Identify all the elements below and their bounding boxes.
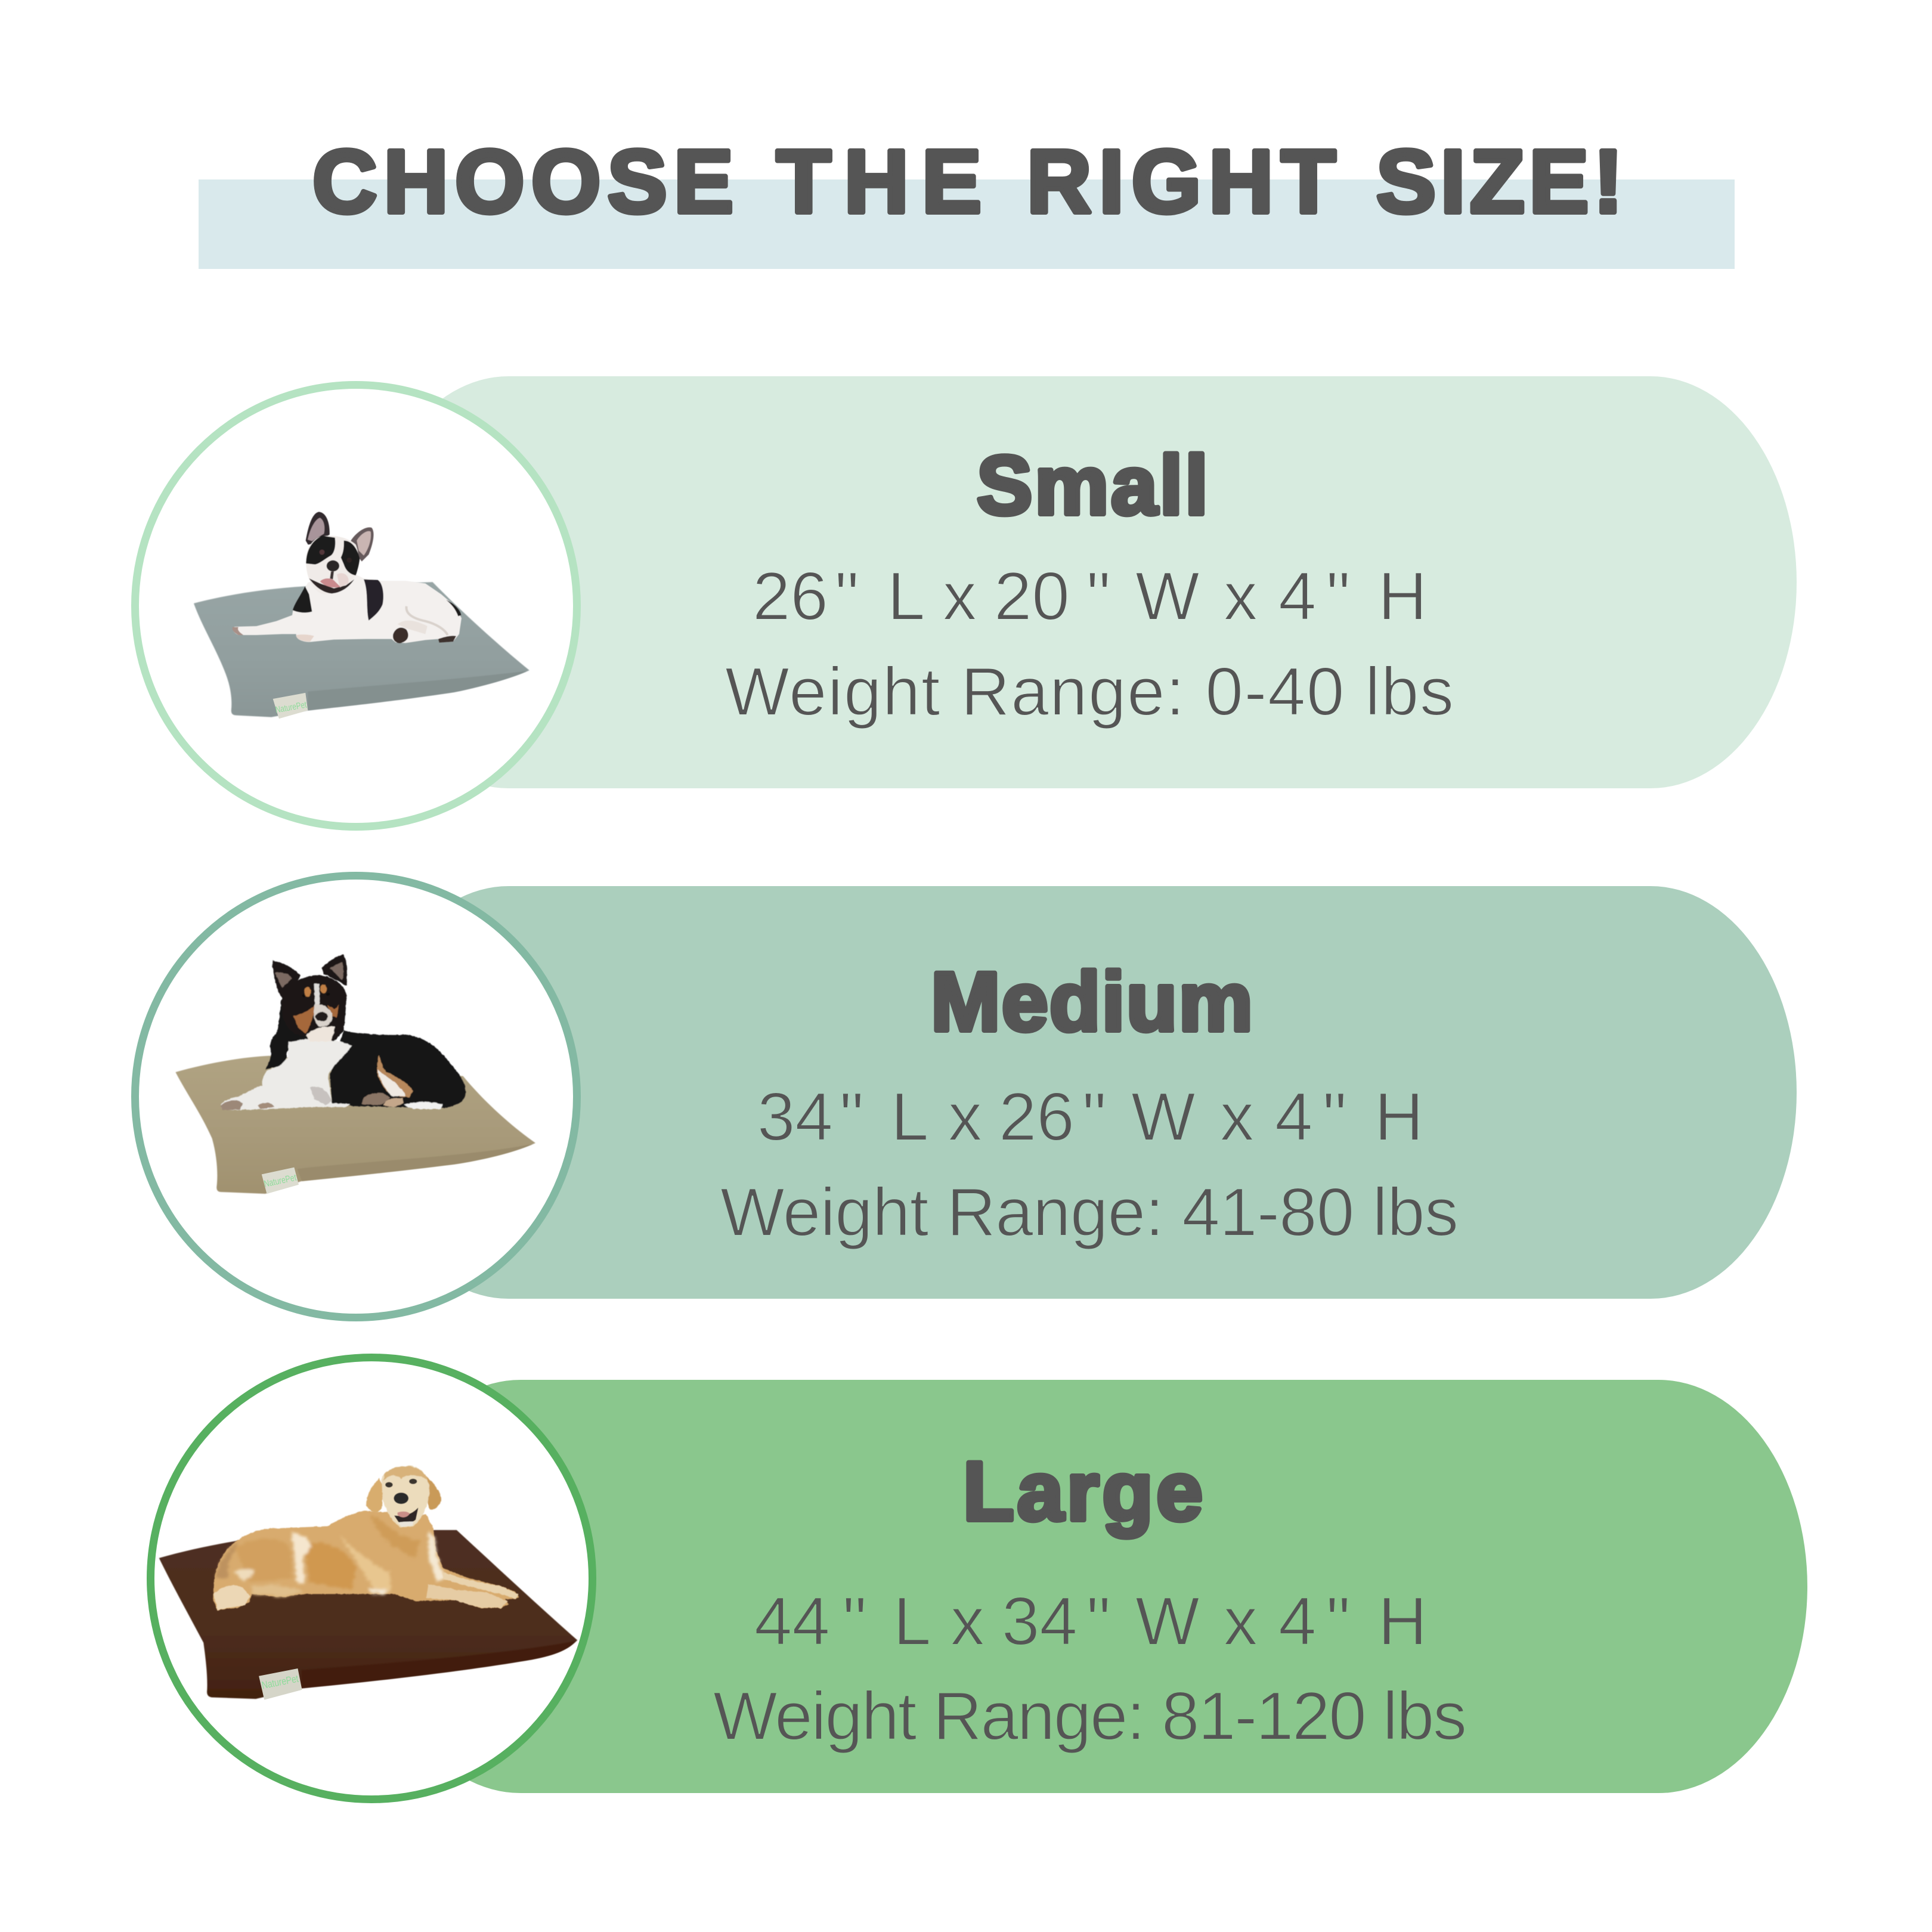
medium heading: Medium (931, 955, 1253, 1048)
medium dimensions: L (891, 1079, 928, 1155)
medium dimensions: W (1131, 1079, 1196, 1155)
title (312, 131, 1623, 231)
small dimensions: 26 (753, 559, 828, 634)
icon: border collie on tan pillow (175, 955, 535, 1194)
panel: small size (363, 376, 1797, 788)
medium dimensions: 26 (999, 1079, 1075, 1155)
large dimensions: 44 (754, 1584, 830, 1659)
brown pillow: NaturePet (261, 1673, 299, 1691)
tan pillow: NaturePet (263, 1173, 298, 1190)
medium dimensions: 4 (1275, 1079, 1312, 1155)
large circle frame (150, 1357, 593, 1800)
large pill background (371, 1380, 1807, 1793)
medium dimensions: 34 (757, 1079, 833, 1155)
small dimensions: x (943, 559, 977, 634)
medium dimensions: H (1374, 1079, 1423, 1155)
medium weight range: Weight Range: 41-80 lbs (720, 1175, 1459, 1250)
large weight range: Weight Range: 81-120 lbs (713, 1679, 1467, 1754)
French bulldog (233, 512, 462, 643)
title: SIZE! (1376, 131, 1623, 231)
panel: large size (371, 1380, 1807, 1793)
title: CHOOSE (312, 131, 733, 231)
golden retriever (213, 1466, 519, 1610)
large dimensions: " (843, 1584, 866, 1659)
brown pillow (159, 1530, 577, 1700)
tan pillow (175, 1055, 535, 1194)
title band (199, 179, 1735, 269)
small weight range: Weight Range: 0-40 lbs (725, 654, 1454, 730)
medium pill background (363, 886, 1797, 1299)
small heading: Small (977, 438, 1208, 532)
title: THE (776, 131, 982, 231)
large dimensions: " (1086, 1584, 1110, 1659)
panel: medium size (363, 886, 1797, 1299)
small circle frame (135, 385, 577, 826)
large dimensions: x (1224, 1584, 1258, 1659)
large dimensions: 4 (1278, 1584, 1316, 1659)
grey pillow (194, 582, 530, 719)
small pill background (363, 376, 1797, 788)
large dimensions: " (1326, 1584, 1350, 1659)
small dimensions: H (1378, 559, 1427, 634)
grey pillow: NaturePet (274, 699, 308, 715)
large dimensions: x (950, 1584, 984, 1659)
medium dimensions: " (1082, 1079, 1106, 1155)
small dimensions: 4 (1278, 559, 1316, 634)
large dimensions: L (893, 1584, 931, 1659)
large dimensions: H (1378, 1584, 1427, 1659)
small dimensions: " (1326, 559, 1350, 634)
small dimensions: 20 (994, 559, 1070, 634)
medium dimensions: x (1220, 1079, 1254, 1155)
icon: French bulldog on grey pillow (194, 512, 530, 719)
large heading: Large (963, 1444, 1203, 1538)
border collie (221, 955, 466, 1110)
large dimensions: 34 (1002, 1584, 1078, 1659)
small dimensions: x (1224, 559, 1258, 634)
small dimensions: " (835, 559, 859, 634)
title: RIGHT (1027, 131, 1336, 231)
medium dimensions: " (1323, 1079, 1346, 1155)
medium dimensions: x (948, 1079, 982, 1155)
small dimensions: " (1086, 559, 1110, 634)
medium dimensions: " (840, 1079, 863, 1155)
small dimensions: L (887, 559, 925, 634)
medium circle frame (135, 875, 577, 1318)
icon: golden retriever on brown pillow (159, 1466, 577, 1700)
large dimensions: W (1135, 1584, 1200, 1659)
small dimensions: W (1135, 559, 1200, 634)
